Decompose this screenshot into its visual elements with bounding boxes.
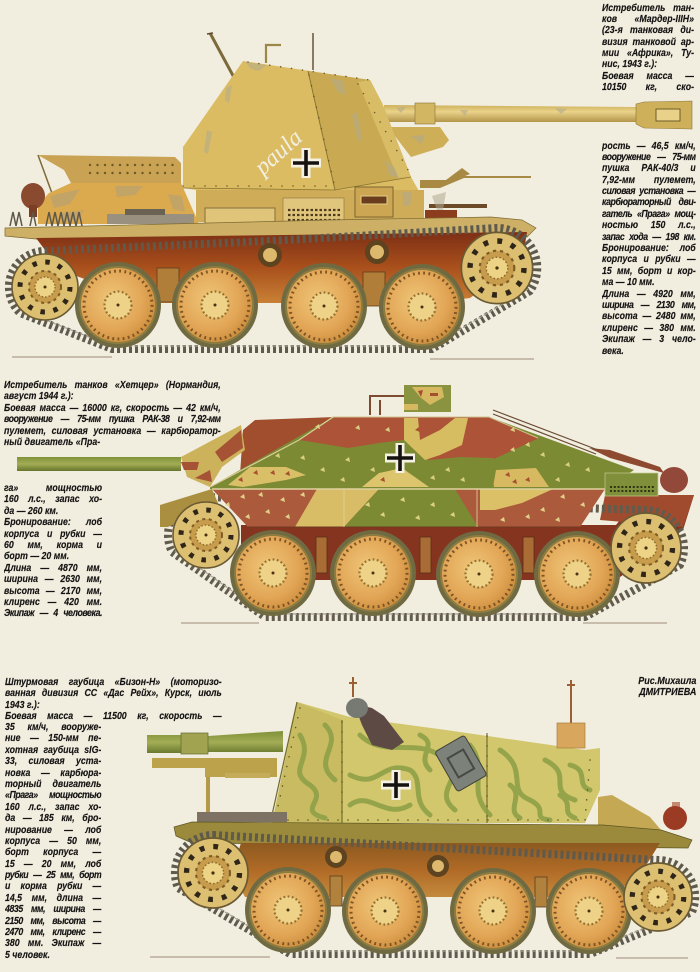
track run	[9, 228, 537, 349]
fender	[174, 822, 692, 848]
text: Bison, lower part: 2150 мм, высота —	[5, 916, 101, 927]
text: Hetzer, lower part: Экипаж — 4 человека.	[4, 608, 102, 619]
engine grille green	[605, 473, 658, 496]
casemate superstructure	[183, 61, 567, 222]
text: Bison, lower part: 160 л.с., запас хо-	[5, 802, 101, 813]
drive sprocket	[461, 232, 533, 304]
return rollers	[258, 240, 389, 267]
text: Hetzer, upper part	[4, 380, 221, 448]
text: Marder III, lower part: рость — 46,5 км/ч,	[602, 140, 696, 152]
front fender	[5, 217, 536, 239]
casemate with wave camouflage	[272, 702, 600, 823]
text: Marder III, lower part: Длина — 4920 мм,	[602, 289, 696, 300]
text: Bison, lower part: рубки — 25 мм, борт	[5, 870, 101, 881]
text: Hetzer, lower part: 60 мм, корма и	[4, 540, 102, 551]
machine gun on rack	[420, 168, 531, 224]
text: Hetzer, lower part: да — 260 км.	[4, 506, 58, 517]
text: Bison, lower part: 4835 мм, ширина —	[5, 904, 101, 915]
text: Hetzer, lower part: Длина — 4870 мм,	[4, 563, 102, 574]
text: Bison, lower part: 5 человек.	[5, 950, 50, 961]
text: Bison, lower part: да — 185 км, бро-	[5, 813, 101, 824]
text: Bison, upper part: 1943 г.):	[5, 700, 40, 711]
text: Marder III, lower part: Бронирование: лоб	[602, 243, 696, 254]
road wheels	[75, 262, 465, 350]
text: Hetzer, lower part: борт — 20 мм.	[4, 551, 69, 562]
hull side panels	[212, 489, 605, 527]
text: Bison, lower part: торный двигатель	[5, 779, 101, 790]
text: Hetzer, lower part: ширина — 2630 мм,	[4, 574, 102, 585]
text: Bison, lower part: 15 — 20 мм, лоб	[5, 859, 101, 870]
text: Marder III, lower part: 7,92-мм пулемет,	[602, 175, 696, 186]
hatch box	[355, 187, 393, 217]
text: Marder III, lower part: ма — 10 мм.	[602, 277, 655, 288]
front sprocket	[173, 502, 239, 568]
text: Hetzer, lower part	[4, 483, 102, 619]
return rollers	[325, 846, 449, 877]
text: Marder III, upper part: мии «Африка», Ту-	[602, 48, 694, 59]
road wheels	[230, 530, 620, 617]
text: Bison, upper part: Штурмовая гаубица «Бизон-Н» (моторизо-	[5, 677, 222, 688]
text: Hetzer, lower part: 160 л.с., запас хо-	[4, 494, 102, 505]
road wheels	[245, 867, 632, 954]
text: Marder III, lower part: высота — 2480 мм,	[602, 311, 696, 322]
antenna and mast	[207, 33, 313, 83]
ground lines	[12, 357, 534, 359]
illustrator credit	[638, 676, 696, 698]
text: Bison, lower part: борт корпуса —	[5, 847, 101, 858]
text: Marder III, upper part: визия танковой ар-	[602, 37, 694, 48]
track run	[168, 497, 684, 617]
text: Marder III, lower part: пушка РАК-40/3 и	[602, 163, 696, 174]
text: Marder III, upper part: Истребитель тан-	[602, 2, 694, 14]
text: Hetzer, upper part: вооружение — 75-мм пушка РАК-38 и 7,92-мм	[4, 414, 221, 425]
lower hull	[241, 495, 694, 580]
text: Marder III, lower part: силовая установка —	[602, 186, 696, 197]
rack tools	[197, 812, 287, 822]
lower hull	[36, 232, 527, 303]
drive sprocket	[178, 838, 248, 908]
light camouflage flecks	[275, 424, 590, 482]
text: Bison, lower part: ние — 150-мм пе-	[5, 733, 101, 744]
text: Bison, lower part: корпуса — 50 мм,	[5, 836, 101, 847]
howitzer barrel	[147, 731, 283, 754]
rear hull with camouflage	[38, 183, 199, 224]
text: Bison, lower part: «Прага» мощностью	[5, 790, 101, 801]
text: Bison, upper part	[5, 677, 222, 722]
text: Bison, lower part	[5, 722, 102, 961]
text: Marder III, upper part: (23-я танковая ди-	[602, 25, 694, 36]
jerrycan	[435, 735, 487, 792]
track run	[175, 835, 695, 954]
rear hump	[240, 417, 335, 475]
suspension units	[157, 268, 385, 306]
text: Hetzer, lower part: клиренс — 420 мм.	[4, 597, 102, 608]
text: Hetzer, lower part: га» мощностью	[4, 483, 102, 494]
text: Hetzer, upper part: Истребитель танков «Хетцер» (Нормандия,	[4, 380, 221, 391]
balkenkreuz	[381, 770, 411, 800]
text: Marder III, lower part	[602, 140, 696, 357]
rear box	[557, 723, 585, 748]
rear idler	[624, 863, 692, 931]
balkenkreuz	[291, 148, 321, 178]
tank 2: Hetzer	[17, 385, 694, 623]
text: Hetzer, upper part: пулемет, силовая установка — карбюратор-	[4, 426, 221, 437]
rear idler	[611, 513, 681, 583]
text: Bison, lower part: и корма рубки —	[5, 881, 101, 892]
tank 3: Bison	[147, 677, 695, 958]
cradle	[152, 758, 277, 813]
engine hump	[598, 795, 661, 830]
text: Marder III, lower part: Экипаж — 3 чело-	[602, 334, 696, 345]
text: Hetzer, upper part: Боевая масса — 16000 кг, скорость — 42 км/ч,	[4, 403, 221, 414]
engine grille	[283, 198, 344, 222]
balkenkreuz	[385, 443, 415, 473]
text: Marder III, lower part: 15 мм, борт и кор-	[602, 266, 696, 277]
rivets	[183, 62, 411, 188]
engine deck louvre	[38, 155, 181, 196]
name on the casemate: paula	[248, 125, 308, 182]
exhaust	[589, 448, 688, 493]
lower hull	[232, 843, 660, 897]
casemate rivets	[276, 708, 590, 820]
text: Marder III, upper part: нис, 1943 г.):	[602, 59, 657, 70]
text: Bison, lower part: новка — карбюра-	[5, 768, 101, 779]
text: Bison, lower part: 35 км/ч, вооруже-	[5, 722, 101, 733]
text: Bison, lower part: 2470 мм, клиренс —	[5, 927, 101, 938]
text: Marder III, lower part: клиренс — 380 мм.	[602, 323, 696, 334]
cupola	[370, 385, 451, 415]
text: Hetzer, upper part: ный двигатель «Пра-	[4, 437, 100, 448]
text: Hetzer, upper part: август 1944 г.):	[4, 391, 74, 402]
jack and tools	[107, 209, 194, 224]
storage box	[205, 208, 275, 225]
text: Marder III, lower part: ностью 150 л.с.,	[602, 220, 696, 231]
text: Bison, upper part: ванная дивизия СС «Дас Рейх», Курск, июль	[5, 688, 222, 699]
text: Marder III, upper part: Боевая масса —	[602, 71, 694, 82]
front plate	[160, 489, 218, 527]
green waves	[300, 725, 590, 820]
text: Bison, lower part: 380 мм. Экипаж —	[5, 938, 101, 949]
text: Bison, lower part: хотная гаубица sIG-	[5, 745, 101, 756]
antennas	[349, 677, 575, 750]
text: Hetzer, lower part: высота — 2170 мм,	[4, 586, 102, 597]
text: Marder III, lower part: корпуса и рубки —	[602, 254, 696, 265]
ground lines	[150, 957, 688, 958]
text: Hetzer, lower part: Бронирование: лоб	[4, 517, 102, 528]
tank 1: Marder III	[5, 33, 692, 359]
idler wheel	[12, 254, 78, 320]
ground lines	[181, 622, 667, 624]
text: Marder III, upper part: 10150 кг, ско-	[602, 82, 694, 93]
grey weathering	[204, 62, 567, 210]
text: Marder III, lower part: вооружение — 75-мм	[602, 152, 696, 163]
text: Marder III, lower part: карбюраторный дви-	[602, 197, 696, 208]
text: Bison, upper part: Боевая масса — 11500 кг, скорость —	[5, 711, 222, 722]
panel flecks	[225, 492, 585, 522]
rear rail	[493, 410, 598, 454]
suspension units	[330, 876, 547, 907]
text: Bison, lower part: 14,5 мм, длина —	[5, 893, 101, 904]
exhaust	[663, 802, 687, 830]
text: Marder III, upper part	[602, 2, 694, 93]
gun barrel	[17, 457, 181, 471]
text: Marder III, lower part: ширина — 2130 мм,	[602, 300, 696, 311]
suspension	[316, 537, 534, 573]
rear fender stowed track	[10, 212, 82, 226]
stowed helmet and bedroll	[346, 698, 404, 750]
text: Marder III, upper part: ков «Мардер-IIIН»	[602, 14, 694, 25]
text: Bison, lower part: нирование — лоб	[5, 825, 101, 836]
muffler	[21, 183, 45, 217]
mantlet	[181, 425, 245, 487]
text: Marder III, lower part: запас хода — 198 км.	[602, 232, 696, 243]
text: Marder III, lower part: гатель «Прага» мощ-	[602, 209, 696, 220]
superstructure with camouflage	[210, 417, 634, 489]
text: Bison, lower part: 33, силовая уста-	[5, 756, 101, 767]
gun barrel with muzzle brake	[384, 101, 692, 157]
text: Hetzer, lower part: корпуса и рубки —	[4, 529, 102, 540]
rear fender	[600, 495, 694, 527]
text: Marder III, lower part: века.	[602, 346, 624, 357]
